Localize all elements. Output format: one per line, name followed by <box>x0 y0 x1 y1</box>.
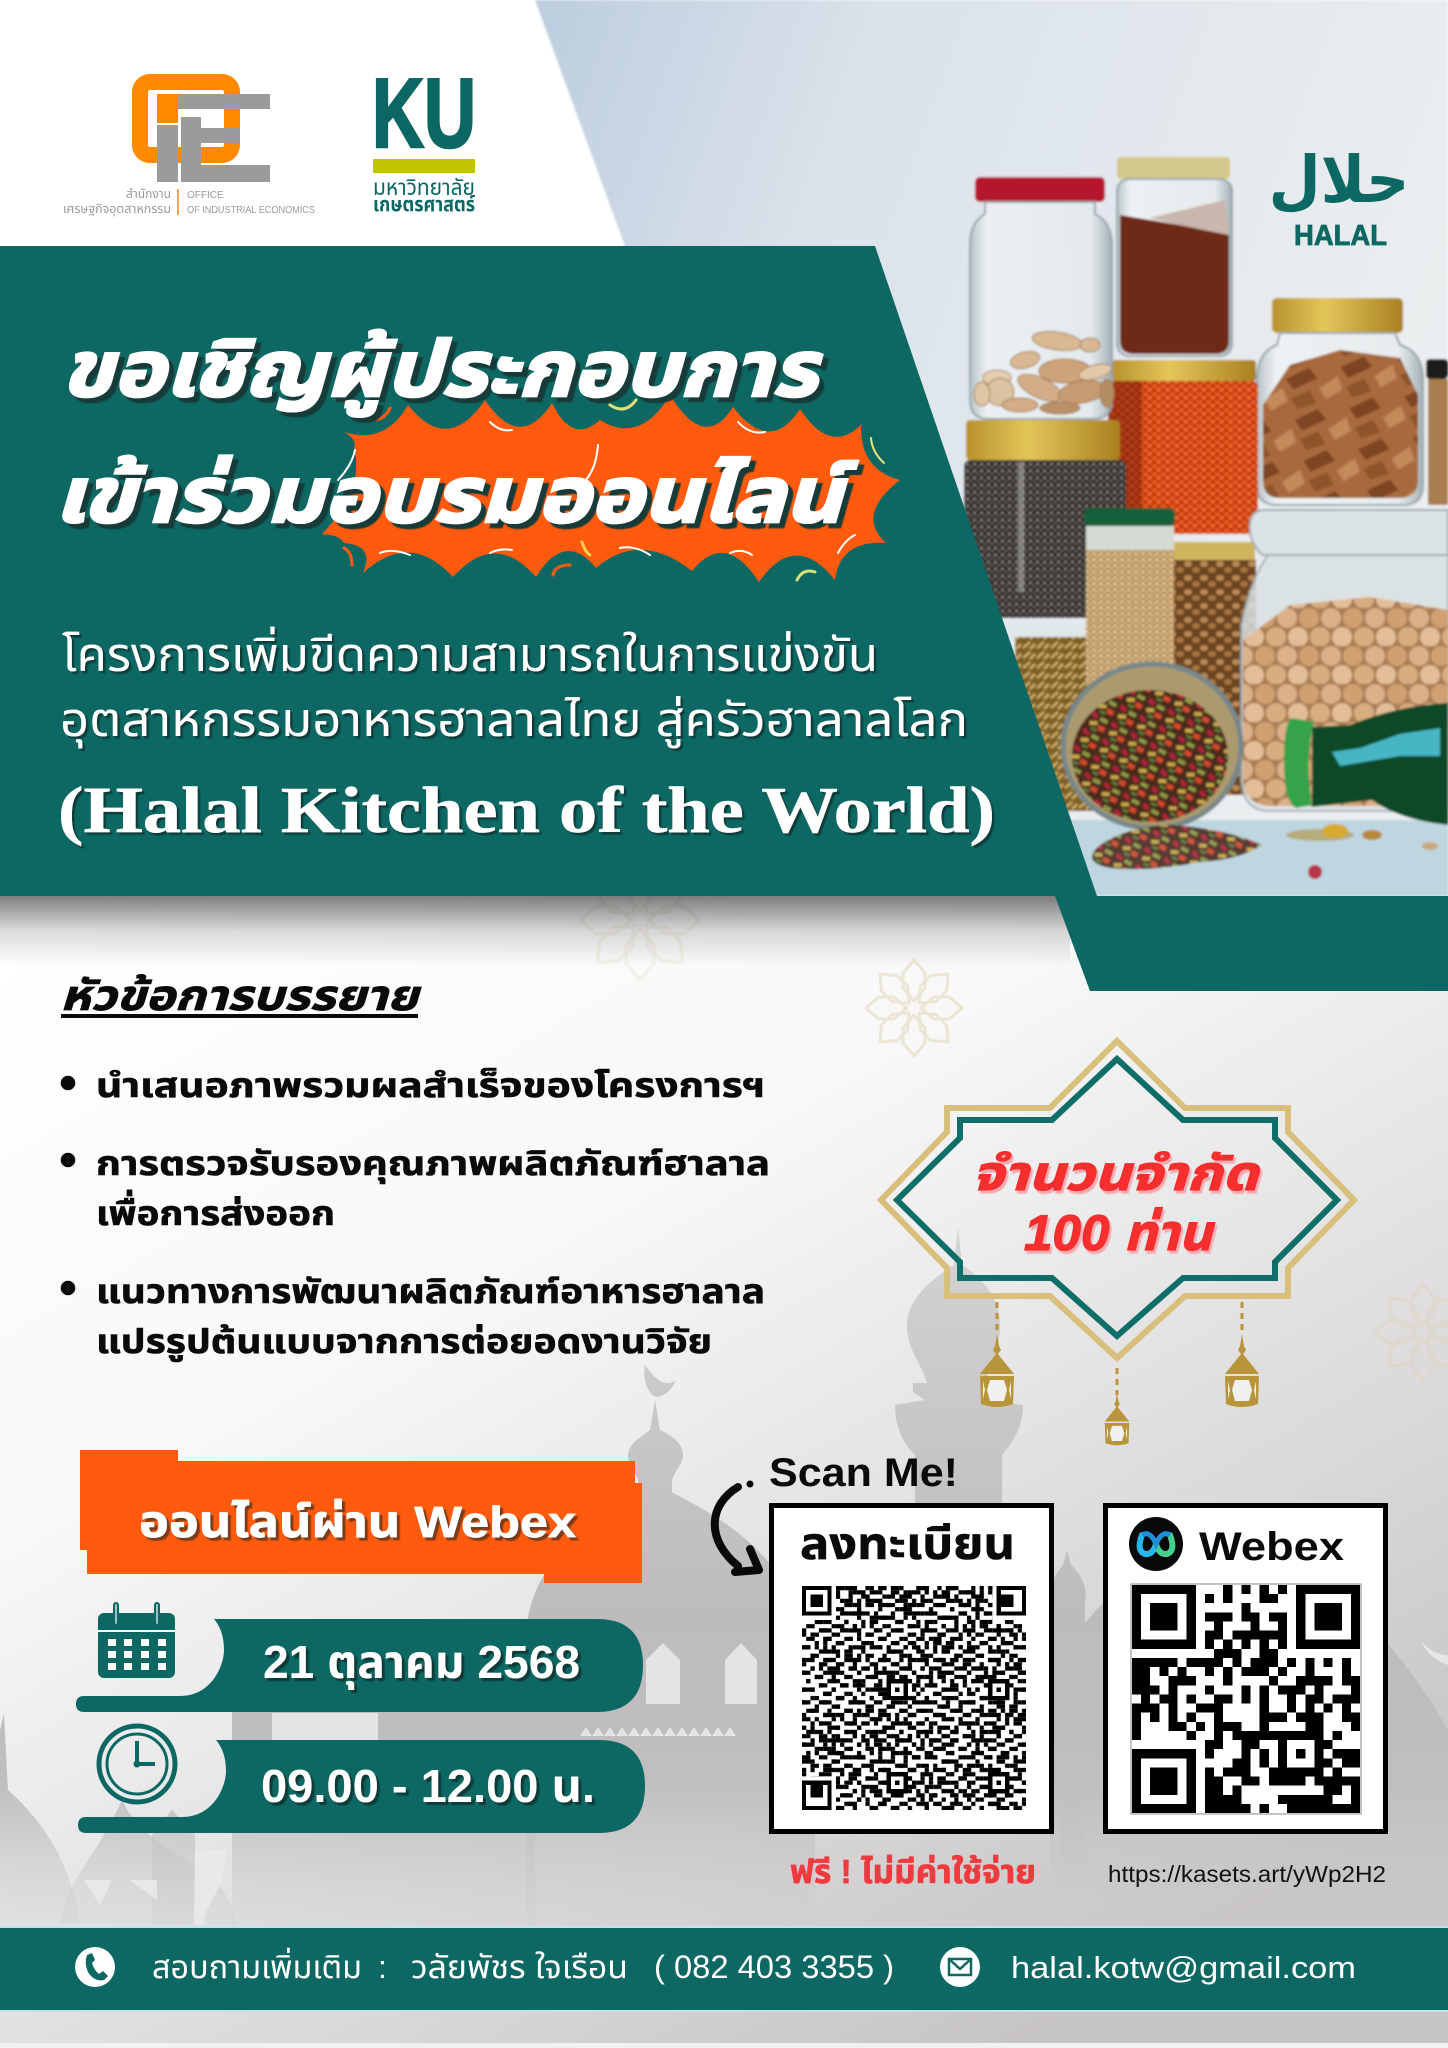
icon: clock <box>99 1726 175 1802</box>
subtitle: โครงการเพิ่มขีดความสามารถในการแข่งขัน <box>62 626 878 681</box>
icon: halal mark <box>1269 142 1409 252</box>
logo: Office of Industrial Economics: OF INDUSTRIAL ECONOMICS <box>187 205 315 216</box>
jar brown powder cream lid <box>1117 157 1232 356</box>
icon: Webex logo <box>1129 1517 1183 1571</box>
logo: Kasetsart University: KU <box>372 58 476 168</box>
icon: phone <box>75 1947 115 1987</box>
badge: limited seats: จำนวนจำกัด <box>972 1148 1261 1201</box>
QR code: Webex <box>1131 1584 1361 1814</box>
mosque windows and arches <box>84 1640 1448 1925</box>
time pill: 09.00 - 12.00 น. <box>261 1760 595 1812</box>
icon: email <box>940 1947 980 1987</box>
footer contact text: วลัยพัชร ใจเรือน <box>411 1949 628 1985</box>
jar sesame green lid <box>1084 508 1175 685</box>
icon: halal mark: HALAL <box>1294 220 1387 252</box>
teal accent bottom right <box>1055 896 1448 991</box>
topic bullet 2: เพื่อการส่งออก <box>96 1189 335 1233</box>
tipped jar of dried flowers <box>1063 664 1241 828</box>
jar almonds red lid <box>970 177 1114 419</box>
photo: glass jars of halal ingredients <box>535 0 1448 896</box>
topic list <box>61 1067 770 1362</box>
logo: Office of Industrial Economics: สำนักงาน <box>126 187 171 201</box>
orange burst behind title <box>322 395 900 582</box>
topic bullet 3: แนวทางการพัฒนาผลิตภัณฑ์อาหารฮาลาล <box>96 1273 765 1311</box>
topic bullet 1: นำเสนอภาพรวมผลสำเร็จของโครงการฯ <box>96 1067 765 1105</box>
top white area <box>0 0 760 250</box>
orange label: online via Webex <box>80 1450 642 1583</box>
almonds <box>974 329 1114 414</box>
footer contact text: ( 082 403 3355 ) <box>654 1949 894 1985</box>
date pill: 21 ตุลาคม 2568 <box>263 1636 580 1690</box>
jar chia seeds gold lid <box>964 420 1126 618</box>
logo: Office of Industrial Economics: OFFICE <box>187 190 224 201</box>
title <box>54 325 858 539</box>
QR code: registration <box>802 1586 1026 1810</box>
subtitle <box>58 626 995 847</box>
footer contact text: : <box>378 1949 387 1985</box>
topic bullet 3: แปรรูปต้นแบบจากการต่อยอดงานวิจัย <box>96 1323 712 1362</box>
bottom light strip <box>0 2043 1448 2048</box>
subtitle: (Halal Kitchen of the World) <box>58 774 995 847</box>
logo: Kasetsart University: มหาวิทยาลัย <box>373 175 475 200</box>
card: Webex QR: Webex <box>1199 1525 1344 1569</box>
logo: Kasetsart University <box>372 58 476 216</box>
logo: Office of Industrial Economics: เศรษฐกิจอุตสาหกรรม <box>63 202 171 216</box>
card: registration QR <box>772 1506 1052 1832</box>
shadow under main panel <box>0 896 1070 966</box>
jar far right black lid <box>1426 359 1448 505</box>
photo table surface <box>1000 820 1448 896</box>
jar red lentils gold lid <box>1108 360 1258 534</box>
panel: main teal banner <box>0 246 1097 896</box>
scan me label: Scan Me! <box>769 1451 958 1495</box>
mosque silhouette background <box>0 1227 1448 1925</box>
jar rice <box>1008 623 1093 811</box>
date pill <box>76 1619 643 1712</box>
title: เข้าร่วมอบรมออนไลน์ <box>54 451 858 539</box>
title: ขอเชิญผู้ประกอบการ <box>61 325 823 417</box>
hanging lanterns <box>980 1302 1259 1445</box>
badge: limited seats: 100 ท่าน <box>1024 1205 1216 1261</box>
topic bullet 2 <box>61 1145 770 1233</box>
icon: calendar <box>98 1605 175 1678</box>
jar corn kernels <box>1174 542 1256 795</box>
free of charge note: ฟรี ! ไม่มีค่าใช้จ่าย <box>790 1853 1036 1890</box>
scattered dried petals <box>1092 824 1438 879</box>
time pill <box>78 1740 645 1833</box>
subtitle: อุตสาหกรรมอาหารฮาลาลไทย สู่ครัวฮาลาลโลก <box>60 693 968 748</box>
orange label: online via Webex: ออนไลน์ผ่าน Webex <box>139 1498 577 1547</box>
burst accent strokes <box>338 400 884 580</box>
Webex short link: https://kasets.art/yWp2H2 <box>1108 1861 1386 1887</box>
photo wall backdrop <box>535 0 1448 896</box>
arrow pointing to QR code <box>715 1482 759 1572</box>
green bottle <box>1284 703 1448 825</box>
card: registration QR: ลงทะเบียน <box>800 1520 1015 1569</box>
icon: halal mark: حلال <box>1269 142 1409 218</box>
logo: Kasetsart University: เกษตรศาสตร์ <box>373 194 475 216</box>
jar dried fruit gold lid <box>1257 298 1423 505</box>
topic bullet 2: การตรวจรับรองคุณภาพผลิตภัณฑ์ฮาลาล <box>96 1145 770 1184</box>
decorative flower ornaments <box>580 860 1448 1380</box>
heading: lecture topics: หัวข้อการบรรยาย <box>60 972 421 1019</box>
footer contact bar <box>0 1926 1448 2012</box>
badge: limited seats <box>881 1041 1354 1358</box>
logo: Office of Industrial Economics <box>63 82 315 216</box>
topic bullet 3 <box>61 1273 765 1362</box>
card: Webex QR <box>1106 1506 1386 1832</box>
footer contact bar: halal.kotw@gmail.com <box>1011 1950 1356 1985</box>
footer contact text: สอบถามเพิ่มเติม <box>152 1947 362 1985</box>
jar chickpeas <box>1241 510 1448 811</box>
footer contact text <box>152 1947 894 1985</box>
